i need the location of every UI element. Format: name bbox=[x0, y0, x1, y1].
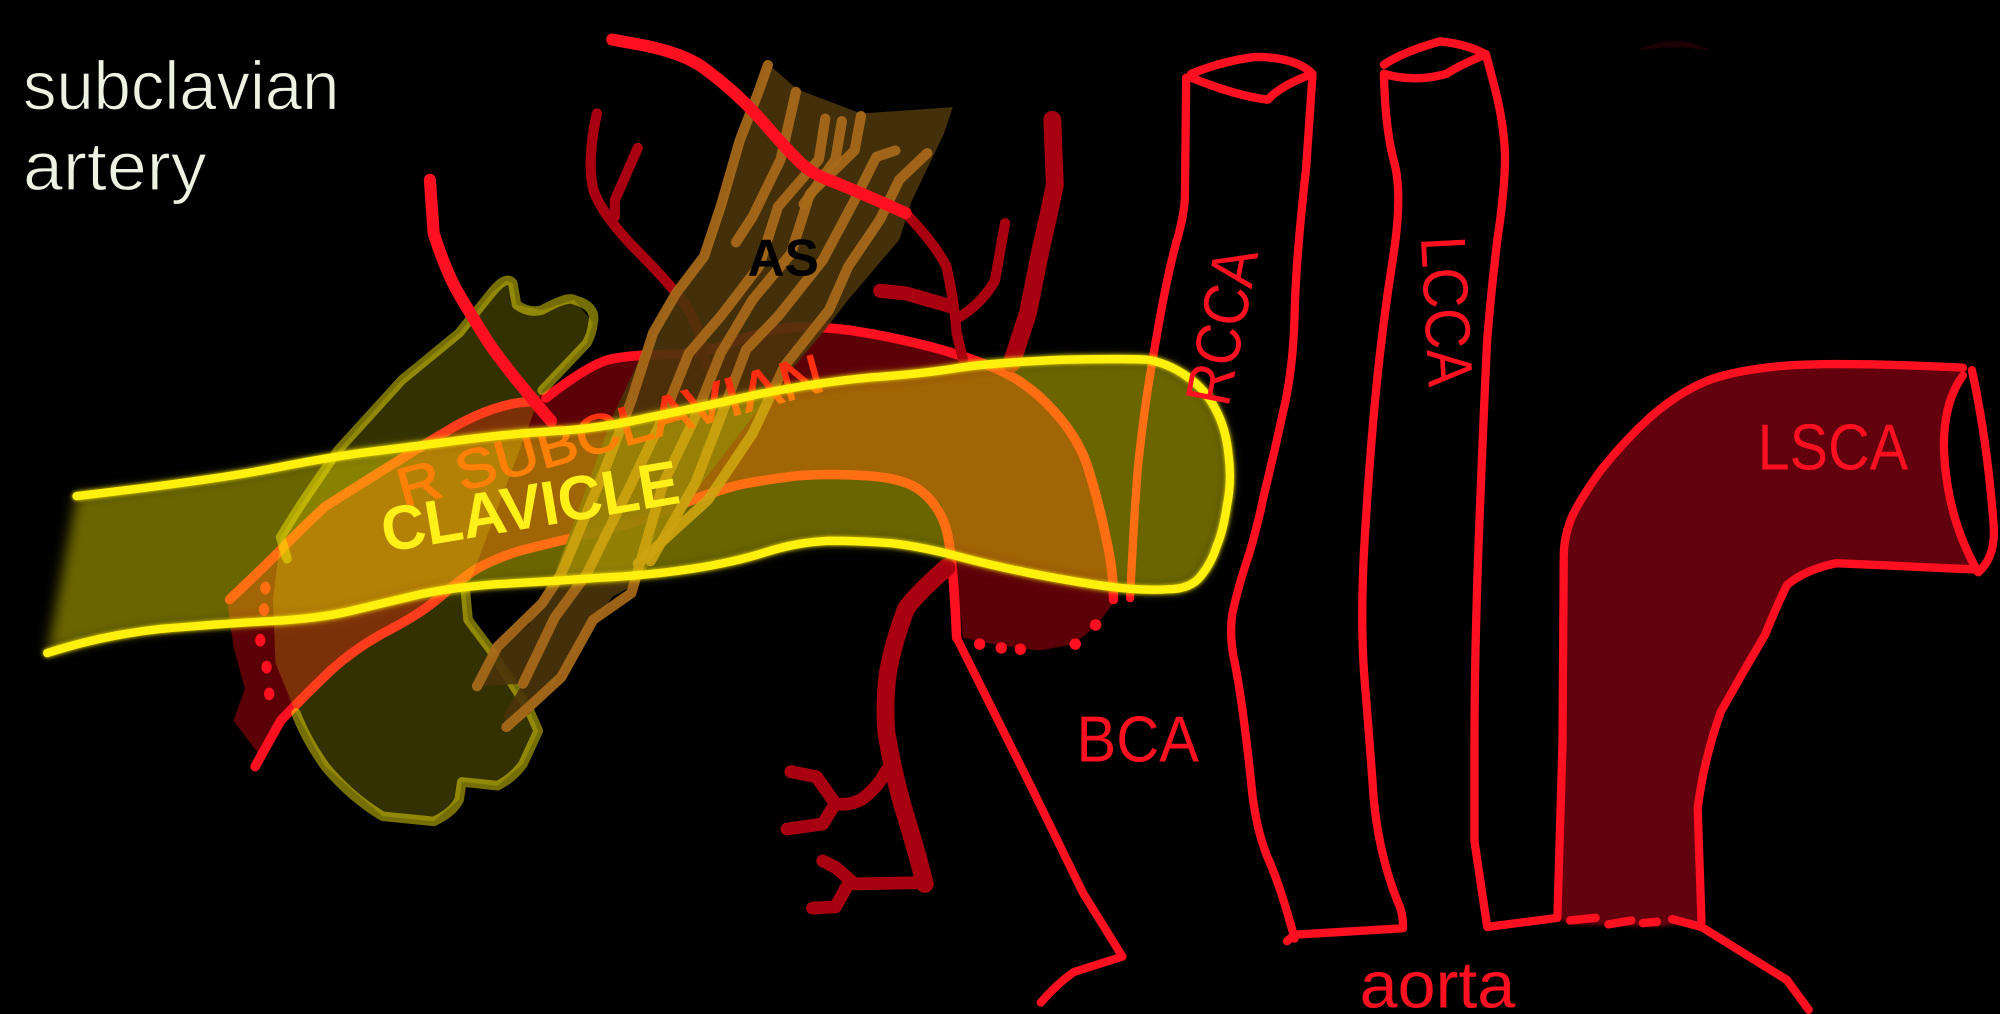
clavicle outline bbox=[47, 359, 1230, 653]
label: AS: AS bbox=[747, 230, 819, 288]
lower side branches bbox=[813, 861, 921, 908]
dotted cut, right bbox=[974, 619, 1101, 655]
title bbox=[23, 48, 339, 205]
RCCA top opening bbox=[1191, 57, 1312, 100]
right subclavian artery bbox=[227, 325, 1116, 767]
label: RCCA: RCCA bbox=[1171, 241, 1272, 411]
RCCA left wall bbox=[1130, 78, 1186, 598]
transverse branch bbox=[880, 291, 950, 306]
subclavian lower wall bbox=[255, 474, 957, 767]
label: R SUBCLAVIAN: R SUBCLAVIAN bbox=[390, 342, 830, 519]
LSCA walls bbox=[1557, 364, 1963, 918]
scapula upper edge bbox=[281, 280, 594, 559]
bright left artery bbox=[430, 180, 551, 421]
clavicle fill bbox=[47, 359, 1230, 653]
plexus body bbox=[478, 64, 953, 727]
main ascending branch bbox=[906, 213, 963, 360]
scapula lower edge bbox=[296, 593, 538, 821]
scapula fill bbox=[273, 281, 593, 821]
LCCA top opening bbox=[1384, 41, 1486, 78]
bright artery across plexus bbox=[612, 40, 906, 213]
descending trunk bbox=[885, 568, 946, 884]
upper side branches bbox=[787, 770, 886, 829]
inferior thyroid / mammary trunk bbox=[787, 568, 946, 908]
RCCA right wall and base bbox=[1231, 74, 1403, 941]
suprascapular branch bbox=[591, 114, 707, 367]
faint arc at top right bbox=[1638, 41, 1712, 51]
small side branch bbox=[615, 148, 638, 217]
thyrocervical branches bbox=[880, 213, 1005, 360]
title line 2: artery bbox=[23, 128, 207, 205]
aortic arch wall bbox=[1702, 927, 1809, 1010]
LSCA fill bbox=[1557, 364, 1978, 927]
LSCA distal opening bbox=[1944, 370, 1994, 572]
dark branches above subclavian, left bbox=[591, 114, 707, 367]
left common carotid artery bbox=[1384, 41, 1557, 927]
scapula outline bbox=[273, 280, 594, 821]
subclavian upper wall bbox=[230, 402, 529, 599]
clavicle bbox=[47, 359, 1230, 653]
subclavian arch wall bbox=[546, 327, 1114, 599]
thick vertebral artery bbox=[1011, 120, 1055, 364]
left subclavian artery bbox=[1557, 364, 1994, 1010]
title line 1: subclavian bbox=[23, 48, 339, 125]
plexus strands bbox=[477, 65, 927, 727]
label: BCA: BCA bbox=[1077, 702, 1200, 775]
label: CLAVICLE: CLAVICLE bbox=[376, 447, 684, 566]
LCCA right wall bbox=[1474, 54, 1557, 927]
LSCA dashed origin bbox=[1570, 918, 1702, 927]
label: LCCA: LCCA bbox=[1407, 234, 1487, 389]
brachial plexus: AS bbox=[477, 64, 953, 727]
brachiocephalic artery wall bbox=[957, 638, 1122, 1003]
LSCA lower wall bbox=[1698, 563, 1978, 922]
subclavian lumen fill bbox=[227, 325, 1116, 753]
right branch bbox=[957, 223, 1005, 319]
dotted proximal cut, left bbox=[255, 582, 274, 700]
right common carotid artery bbox=[1130, 57, 1403, 941]
label: LSCA: LSCA bbox=[1758, 410, 1909, 483]
